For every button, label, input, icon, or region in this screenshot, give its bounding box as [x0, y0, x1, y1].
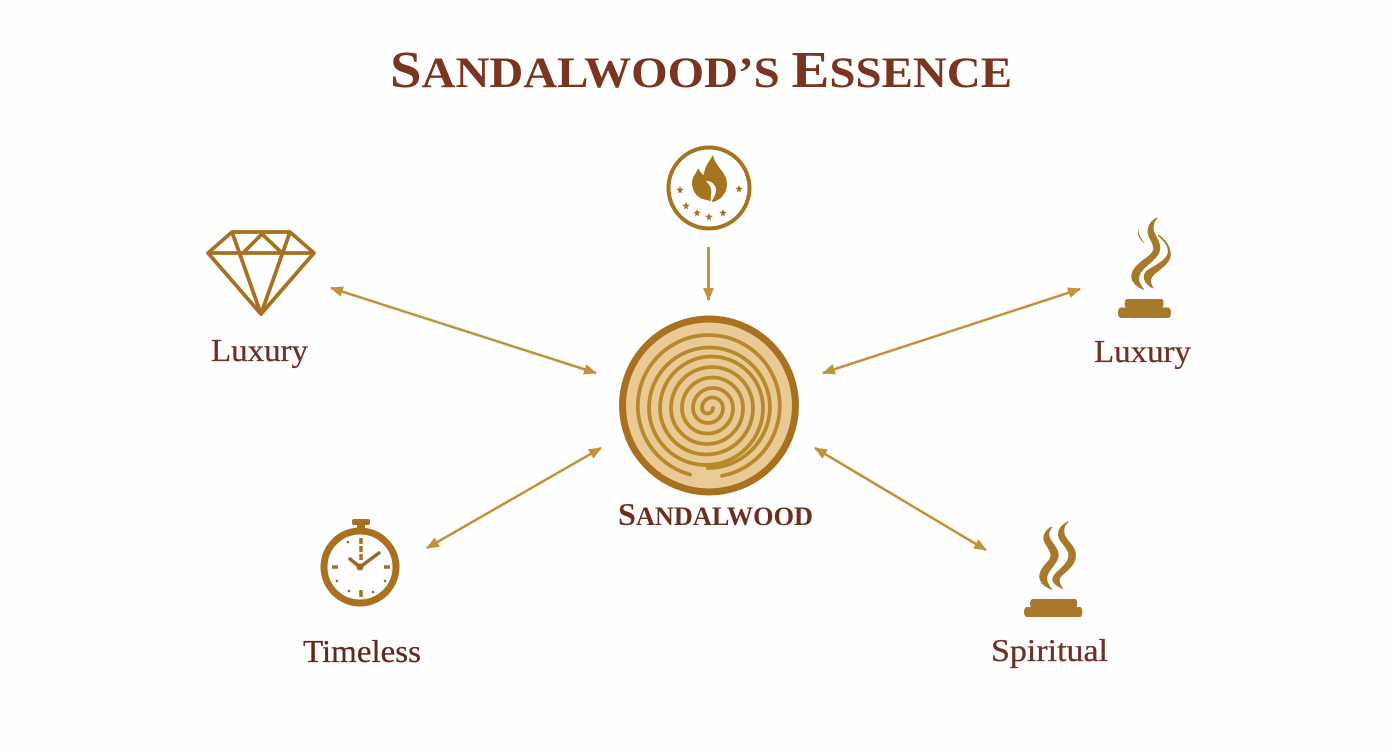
- arrow: luxury smoke to sandalwood: [823, 289, 1080, 373]
- icon: flame badge: [668, 148, 750, 228]
- label: sandalwood: SANDALWOOD: [618, 496, 813, 532]
- outer wood ring: [638, 335, 780, 476]
- icon: stopwatch: [324, 519, 396, 603]
- label: luxury left: Luxury: [211, 332, 308, 368]
- label: timeless: Timeless: [303, 633, 421, 669]
- arrow: luxury diamond to sandalwood: [331, 288, 596, 373]
- arrow: spiritual to sandalwood: [815, 448, 986, 550]
- wood rings spiral: [649, 348, 770, 468]
- icon: sandalwood cross-section: [622, 319, 796, 492]
- label: spiritual: Spiritual: [991, 632, 1108, 668]
- icon: incense smoke lower right: [1024, 522, 1082, 617]
- icon: diamond: [208, 232, 314, 314]
- label: luxury right: Luxury: [1094, 333, 1191, 369]
- arrow: timeless to sandalwood: [427, 448, 601, 548]
- title: SANDALWOOD’S ESSENCE: [390, 42, 1012, 99]
- icon: incense smoke right: [1118, 218, 1171, 318]
- arrow: flame to sandalwood: [707, 247, 710, 300]
